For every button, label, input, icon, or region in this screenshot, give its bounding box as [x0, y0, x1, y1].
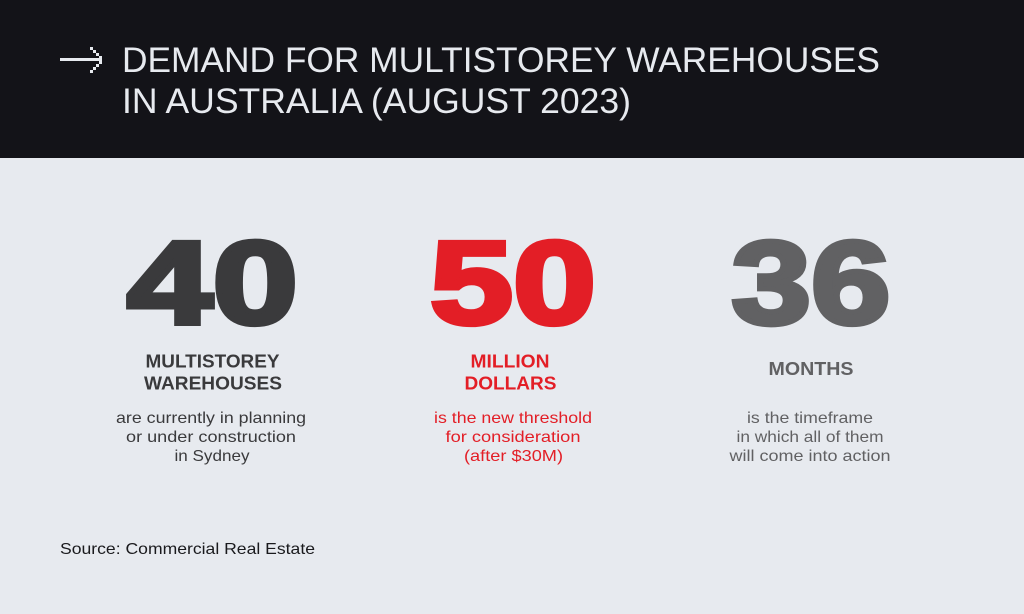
stat: 40 multistorey warehouses — [116, 218, 306, 465]
header band — [0, 0, 1024, 158]
description: are currently in planning — [116, 410, 306, 427]
icon: arrow — [60, 47, 102, 73]
description: in Sydney — [174, 448, 250, 465]
label: million dollars: MILLION — [470, 350, 550, 372]
description: for consideration — [446, 429, 580, 446]
number: 50: 50 — [430, 218, 596, 350]
stat: 50 million dollars — [430, 218, 596, 465]
description — [116, 410, 306, 465]
description: (after $30M) — [464, 448, 563, 465]
source note: Source: Commercial Real Estate — [60, 541, 315, 558]
number: 40: 40 — [127, 218, 298, 350]
label: multistorey warehouses: MULTISTOREY — [146, 350, 280, 372]
title — [122, 41, 880, 121]
label: months: MONTHS — [768, 358, 854, 379]
label: million dollars: DOLLARS — [464, 372, 556, 394]
description — [434, 410, 592, 465]
description: is the timeframe — [747, 410, 873, 427]
description: or under construction — [126, 429, 296, 446]
label: multistorey warehouses — [144, 350, 282, 394]
title: IN AUSTRALIA (AUGUST 2023) — [122, 82, 631, 121]
number: 36: 36 — [732, 218, 890, 350]
stat: 36 months — [728, 218, 890, 465]
title: DEMAND FOR MULTISTOREY WAREHOUSES — [122, 41, 880, 80]
description — [728, 410, 890, 465]
description: will come into action — [728, 448, 890, 465]
description: is the new threshold — [434, 410, 592, 427]
label: million dollars — [464, 350, 556, 394]
description: in which all of them — [736, 429, 884, 446]
label: multistorey warehouses: WAREHOUSES — [144, 372, 282, 394]
